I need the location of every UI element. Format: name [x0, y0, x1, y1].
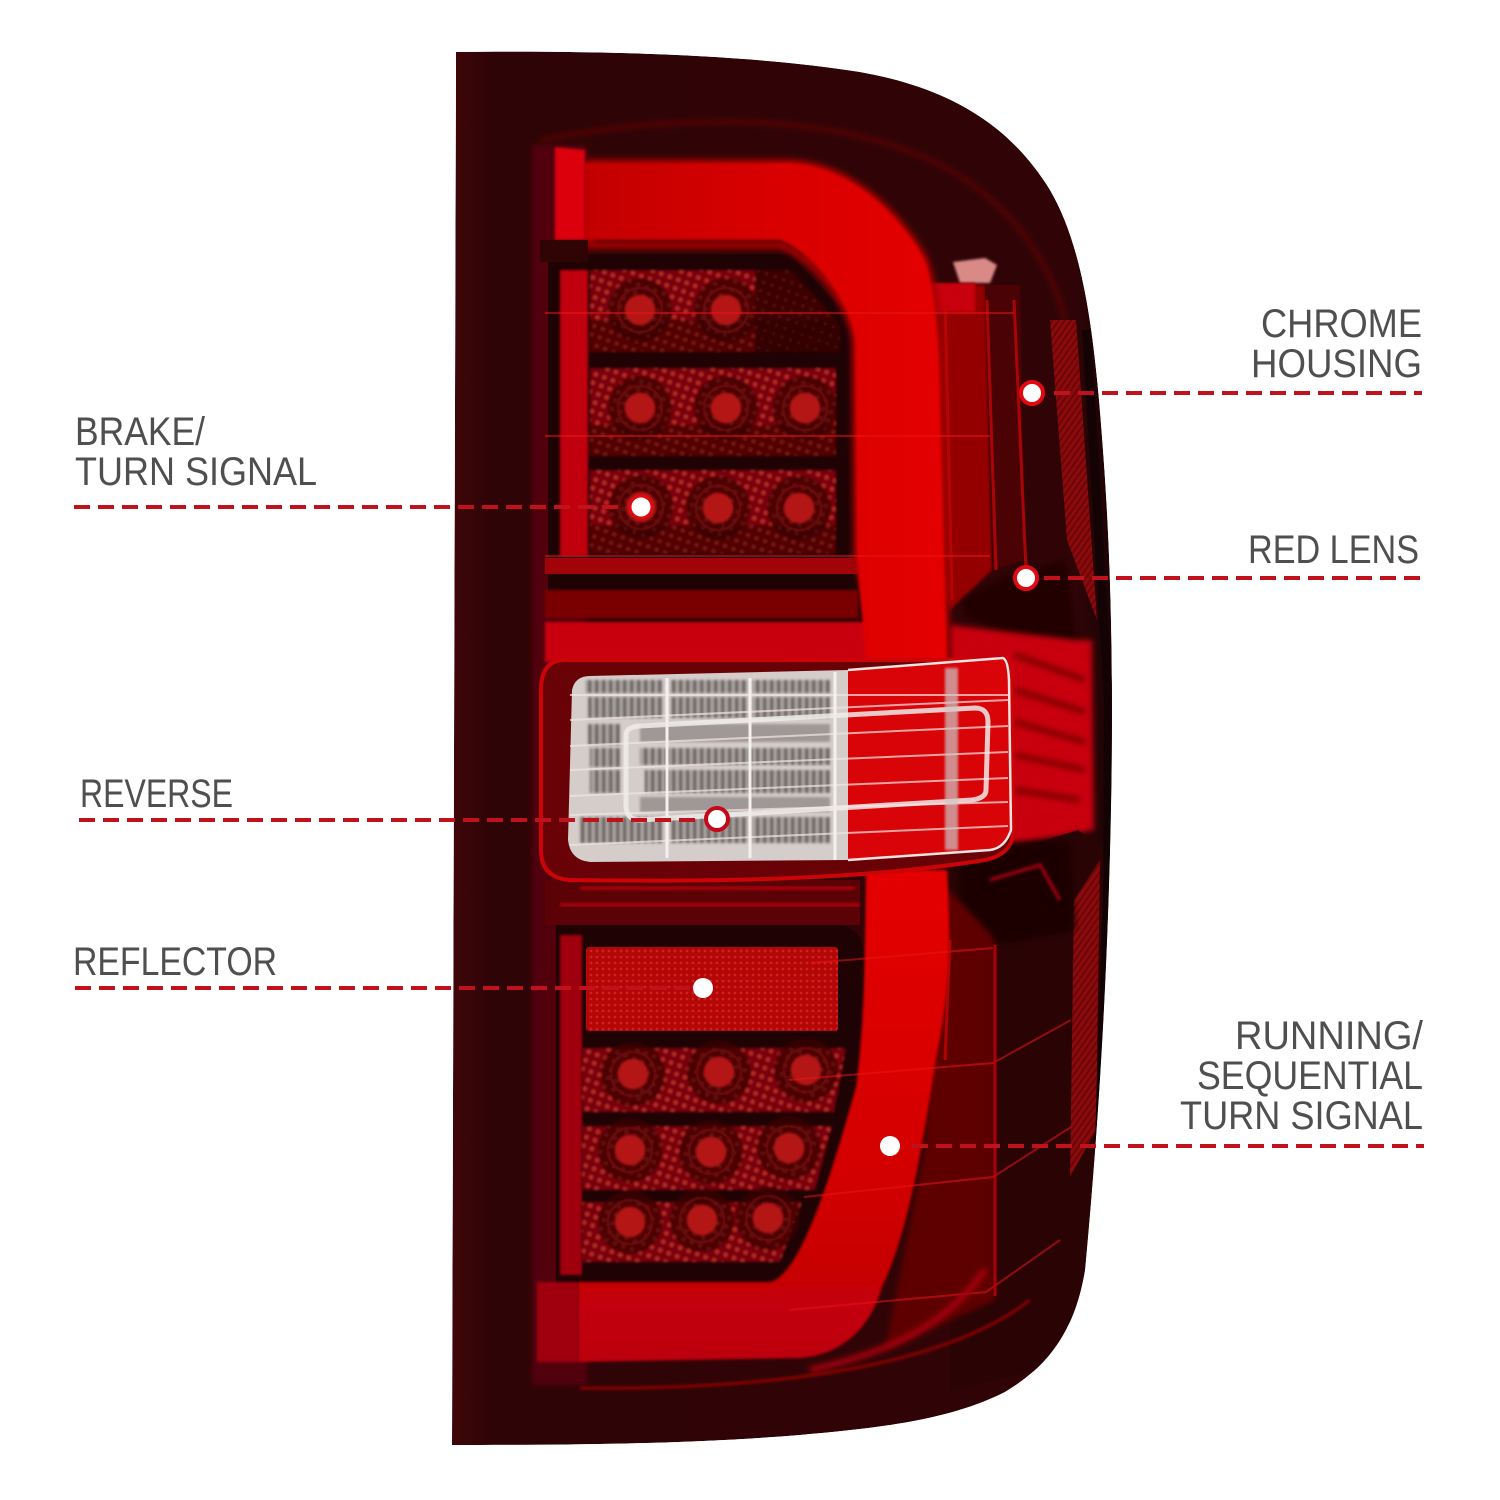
- faint bottom line: [580, 1300, 1030, 1388]
- label: chrome housing: CHROME: [1261, 302, 1422, 346]
- tube end cap lower: [537, 1282, 578, 1362]
- bands below upper LED cluster: [545, 558, 858, 574]
- label: reverse: REVERSE: [80, 772, 233, 816]
- marker: brake: [630, 496, 652, 518]
- chrome housing glint: [953, 258, 997, 283]
- label: brake/turn signal: [75, 410, 317, 494]
- callout line: brake: [74, 505, 625, 509]
- bar under tube cap: [540, 240, 588, 262]
- light tube glow: [590, 163, 947, 660]
- chrome housing vertical edges: [945, 300, 1026, 600]
- label: running/sequential turn signal: [1180, 1014, 1424, 1138]
- red lens dark recess: [963, 560, 1077, 640]
- light tube lower: [578, 870, 949, 1362]
- callout line: chrome housing: [1054, 391, 1422, 395]
- marker: running turn signal: [880, 1136, 900, 1156]
- lower left strip: [560, 935, 582, 1275]
- label: chrome housing: HOUSING: [1251, 342, 1422, 386]
- upper LED glow strip: [559, 268, 588, 558]
- label: chrome housing: [1251, 302, 1422, 386]
- marker: chrome housing: [1021, 382, 1043, 404]
- upper red columns beside tube: [938, 285, 992, 610]
- faint red contour near top edge: [540, 122, 1065, 320]
- lower recess: [955, 840, 1075, 945]
- upper LED frame: [548, 254, 858, 600]
- light tube upper: [585, 163, 947, 660]
- rib area right of reverse: [950, 625, 1094, 845]
- inner left dim strip: [532, 145, 587, 1385]
- marker: reverse: [706, 808, 728, 830]
- lower LED frame: [556, 925, 864, 1285]
- label: running/sequential turn signal: TURN SIGNAL: [1180, 1094, 1423, 1138]
- band below reverse: [582, 880, 860, 925]
- lower LED cluster: [582, 1038, 846, 1262]
- tube end cap upper: [555, 147, 585, 240]
- reverse lens: [568, 658, 1011, 862]
- rim right: [1082, 330, 1113, 1200]
- callout line: reflector: [75, 986, 690, 990]
- marker: reflector: [693, 978, 713, 998]
- callout line: reverse: [79, 818, 702, 822]
- label: reflector: REFLECTOR: [73, 940, 277, 984]
- reverse lens surround: [541, 660, 1013, 881]
- reflector: [586, 947, 838, 1031]
- right lens strip upper: [1050, 320, 1097, 620]
- tail light housing: [452, 52, 1113, 1445]
- upper LED cluster: [560, 270, 840, 556]
- label: red lens: RED LENS: [1248, 528, 1419, 572]
- label: running/sequential turn signal: RUNNING/: [1235, 1014, 1424, 1058]
- callout line: red lens: [1044, 576, 1422, 580]
- marker: red lens: [1015, 567, 1037, 589]
- thin lens lines: [545, 313, 1071, 1310]
- callout line: running turn signal: [912, 1144, 1424, 1148]
- right lens strip lower: [1070, 860, 1100, 1177]
- label: brake/turn signal: TURN SIGNAL: [75, 450, 317, 494]
- lower right dark field: [1032, 830, 1103, 1372]
- label: brake/turn signal: BRAKE/: [75, 410, 206, 454]
- label: running/sequential turn signal: SEQUENTIAL: [1197, 1054, 1423, 1098]
